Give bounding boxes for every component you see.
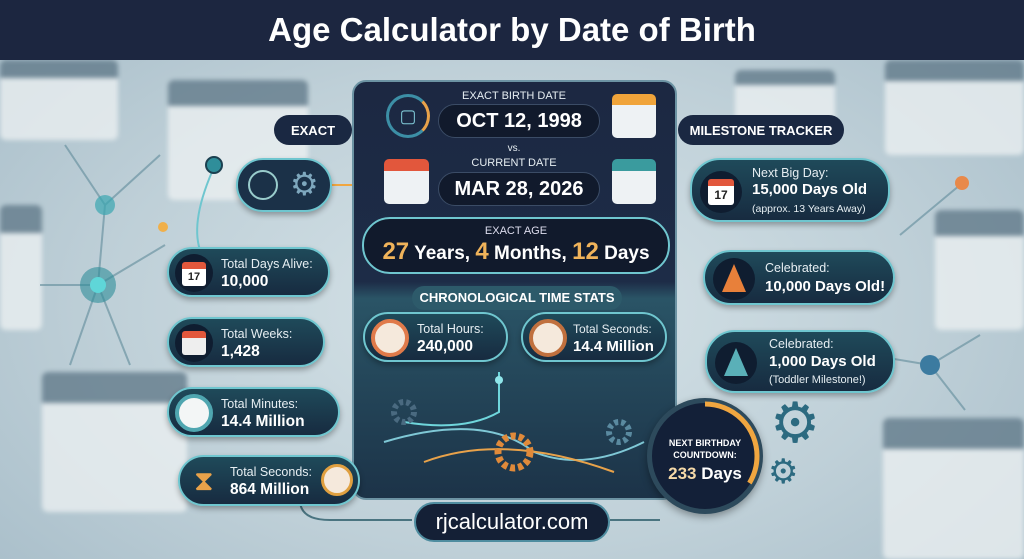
total minutes: 14.4 Million bbox=[221, 413, 305, 430]
total seconds: Total Seconds: bbox=[573, 322, 652, 336]
next birthday countdown bbox=[647, 398, 763, 514]
total days alive: 10,000 bbox=[221, 273, 268, 290]
chrono stats heading: CHRONOLOGICAL TIME STATS bbox=[420, 290, 614, 305]
exact age pill: EXACT AGE bbox=[485, 225, 547, 237]
total seconds: 14.4 Million bbox=[573, 338, 654, 355]
total minutes bbox=[167, 387, 340, 437]
title bar bbox=[0, 0, 1024, 60]
total seconds left: Total Seconds: bbox=[230, 465, 312, 479]
next big day bbox=[690, 158, 890, 222]
icon: orange calendar bbox=[612, 94, 656, 138]
next big day: 15,000 Days Old bbox=[752, 181, 867, 198]
central panel: CURRENT DATE bbox=[471, 157, 557, 169]
icon pill: calendar + gear bbox=[236, 158, 332, 212]
total seconds bbox=[521, 312, 667, 362]
birth date pill bbox=[438, 104, 600, 138]
website pill: rjcalculator.com bbox=[436, 509, 588, 534]
next big day: Next Big Day: bbox=[752, 166, 828, 180]
MILESTONE TRACKER tag bbox=[678, 115, 844, 145]
total weeks: Total Weeks: bbox=[221, 327, 292, 341]
next big day: (approx. 13 Years Away) bbox=[752, 203, 866, 215]
total seconds left: ⧗ bbox=[194, 465, 214, 496]
total days alive: Total Days Alive: bbox=[221, 257, 313, 271]
next birthday countdown: COUNTDOWN: bbox=[673, 450, 737, 460]
EXACT tag bbox=[274, 115, 352, 145]
exact age pill bbox=[362, 217, 670, 274]
website pill bbox=[414, 502, 610, 542]
MILESTONE TRACKER tag: MILESTONE TRACKER bbox=[690, 122, 832, 138]
current date pill: MAR 28, 2026 bbox=[455, 178, 583, 200]
central panel bbox=[352, 80, 677, 500]
text: ⚙ bbox=[768, 453, 798, 491]
title bar: Age Calculator by Date of Birth bbox=[268, 11, 756, 48]
chrono stats heading bbox=[412, 286, 622, 310]
total minutes: Total Minutes: bbox=[221, 397, 298, 411]
celebrated 1000: Celebrated: bbox=[769, 337, 834, 351]
total days alive: 17 bbox=[188, 271, 200, 283]
celebrated 10000 bbox=[703, 250, 895, 305]
celebrated 1000 bbox=[705, 330, 895, 393]
icon pill: calendar + gear: ⚙ bbox=[290, 166, 319, 202]
celebrated 1000: 1,000 Days Old bbox=[769, 353, 876, 370]
birth date label: EXACT BIRTH DATE bbox=[462, 90, 566, 102]
icon: red calendar bbox=[384, 159, 429, 204]
gears illustration bbox=[384, 372, 644, 473]
celebrated 10000: 10,000 Days Old! bbox=[765, 278, 885, 295]
icon: birth calendar ring: ▢ bbox=[399, 106, 416, 126]
total hours: Total Hours: bbox=[417, 322, 484, 336]
EXACT tag: EXACT bbox=[291, 122, 335, 138]
total weeks bbox=[167, 317, 325, 367]
icon: teal calendar bbox=[612, 159, 656, 204]
next big day: 17 bbox=[714, 188, 728, 202]
celebrated 10000: Celebrated: bbox=[765, 261, 830, 275]
total days alive bbox=[167, 247, 330, 297]
total weeks: 1,428 bbox=[221, 343, 260, 360]
total hours bbox=[363, 312, 508, 362]
total seconds left bbox=[178, 455, 360, 506]
exact age pill: 27 Years, 4 Months, 12 Days bbox=[382, 238, 650, 265]
birth date pill: OCT 12, 1998 bbox=[456, 110, 582, 132]
celebrated 1000: (Toddler Milestone!) bbox=[769, 374, 866, 386]
icon: birth calendar ring bbox=[386, 94, 430, 138]
vs: vs. bbox=[508, 143, 520, 154]
current date pill bbox=[438, 172, 600, 206]
total seconds left: 864 Million bbox=[230, 481, 309, 498]
next birthday countdown: NEXT BIRTHDAY bbox=[669, 438, 741, 448]
next birthday countdown: 233 Days bbox=[668, 464, 742, 483]
gears right: ⚙ bbox=[770, 391, 820, 454]
total hours: 240,000 bbox=[417, 338, 473, 355]
